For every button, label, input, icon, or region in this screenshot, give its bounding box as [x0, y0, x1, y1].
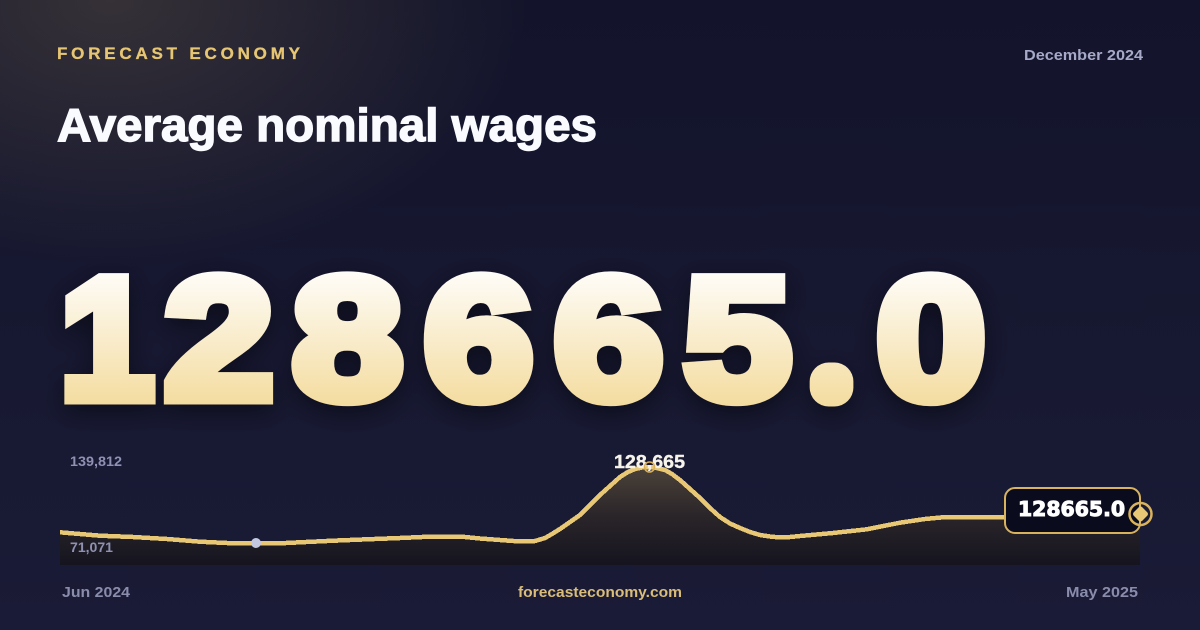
start date: Jun 2024 — [62, 584, 131, 601]
current value callout: 128665.0 — [1018, 497, 1125, 521]
big value: . — [826, 352, 837, 396]
axis max label: 139,812 — [70, 454, 122, 469]
end date: May 2025 — [1066, 584, 1138, 601]
title: Average nominal wages — [57, 99, 597, 151]
peak marker — [644, 462, 654, 472]
big value — [60, 243, 986, 435]
website: forecasteconomy.com — [518, 584, 682, 601]
big value: 2 — [164, 243, 274, 435]
big value: 6 — [554, 243, 663, 435]
current point marker — [1130, 503, 1152, 525]
sparkline chart — [60, 452, 1152, 565]
big value: 6 — [424, 243, 533, 435]
big value: 8 — [292, 243, 403, 435]
axis min label: 71,071 — [70, 540, 114, 555]
brand label: FORECAST ECONOMY — [57, 44, 301, 63]
chart line — [60, 467, 1010, 544]
peak label: 128,665 — [614, 452, 685, 472]
big value: 0 — [876, 243, 986, 435]
chart area fill — [60, 467, 1140, 565]
big value: 1 — [60, 243, 154, 435]
current value callout — [1005, 488, 1140, 533]
date: December 2024 — [1024, 47, 1144, 64]
low point marker — [251, 538, 261, 548]
big value: 5 — [684, 243, 791, 435]
